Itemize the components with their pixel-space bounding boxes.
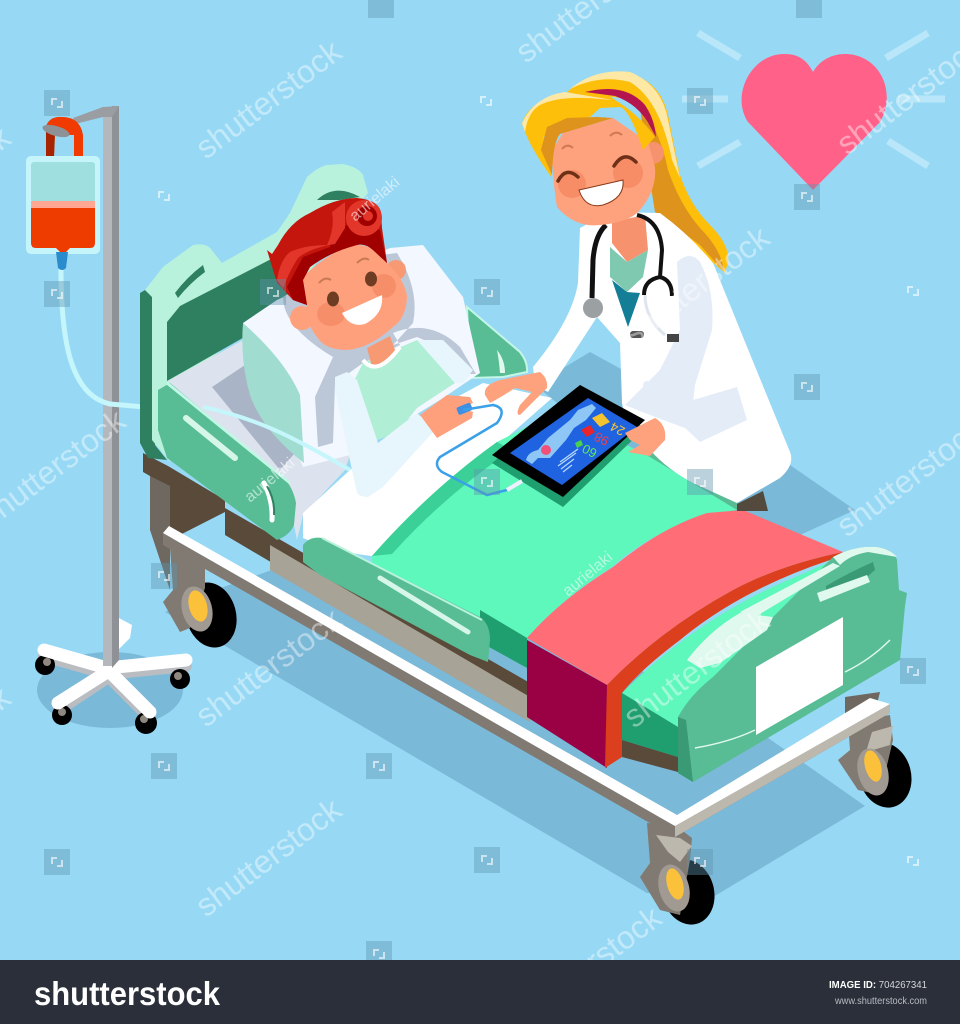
doctor cheeks [558,170,586,198]
body scan [526,404,596,464]
IV stand [26,106,190,734]
rear side rail [467,307,527,378]
footboard [678,547,907,782]
tablet body [492,385,645,497]
pillow mint side [242,323,304,463]
watermarks: aurielaki [347,174,403,225]
tablet: 60 [580,441,599,461]
IV bag [26,156,100,254]
tablet [492,385,645,507]
hanger arm [73,106,119,124]
watermark corner marks [52,97,918,958]
doctor eyes [558,157,636,181]
wheel: foot front [640,823,722,931]
side [605,552,843,768]
doctor brows [562,133,622,149]
patient hand [420,395,473,438]
finger sensor cable [437,405,507,495]
bed under-frame [143,453,880,722]
watermarks: aurielaki [242,455,298,506]
doctor face [552,118,655,225]
pillow shading [283,253,476,447]
doctor coat [533,212,791,503]
footer url: www.shutterstock.com [834,996,927,1007]
cable plug [507,481,522,490]
bag strap [46,117,83,156]
headboard side [140,290,167,460]
top [527,510,843,685]
pillow [242,245,480,467]
bed outer frame [163,526,890,837]
back hair [567,72,728,273]
doctor ear [642,142,664,164]
doctor legs [737,491,768,511]
headboard panel [167,256,292,381]
patient hair [267,198,387,305]
scrub top [610,247,648,292]
IV tube on mattress [203,407,350,470]
footer bar [0,960,960,1024]
tablet: 98 [592,429,611,449]
neck [612,215,648,262]
watermarks: shutterstock [189,790,349,924]
patient brows [319,259,369,283]
tablet: 24 [608,419,627,439]
wheel: foot right [838,715,919,814]
patient arm [335,372,435,497]
watermarks: shutterstock [617,218,777,352]
wheel: head side [163,548,244,653]
near side rail at head [158,383,296,540]
mattress [168,340,350,540]
patient cheeks [317,302,345,326]
watermarks: shutterstock [617,601,777,735]
patient eyes [327,292,339,306]
foot mattress [622,555,870,772]
rear blanket strip [648,447,742,511]
near side rail at foot [303,538,490,662]
heart [742,54,887,190]
patient ears [290,306,314,330]
footer image id: IMAGE ID: 704267341 [829,980,927,991]
front hair [522,91,655,178]
tablet screen [510,398,637,485]
headboard grip [175,265,205,298]
patient [267,198,473,440]
end face [527,640,607,768]
headband [585,89,656,137]
patient hair curl [346,200,382,236]
tablet base [492,393,645,507]
neck [367,336,395,367]
pole [103,112,112,666]
footer logo: shutterstock [34,975,221,1012]
IV nozzle [56,252,68,270]
vitals [592,413,610,427]
watermarks: aurielaki [560,549,616,600]
coat sleeve shade [625,256,712,430]
name card [756,617,843,735]
doctor hands [485,372,665,456]
red blanket [527,510,843,768]
patient mouth [342,295,382,325]
headboard face [145,164,368,462]
floor shadows [37,352,865,897]
sheet [303,383,552,556]
green blanket [372,410,737,668]
IV tube [61,268,157,408]
patient torso [353,340,455,440]
heart rays [682,33,945,166]
patient face [303,245,407,350]
coat pocket [682,387,747,442]
watermarks: shutterstock [189,32,349,166]
stand base [35,617,190,734]
headboard [140,164,368,462]
stethoscope [583,215,679,342]
pillow body [243,245,480,467]
doctor mouth [579,180,623,206]
doctor [522,71,791,511]
watermarks: shutterstock [189,600,349,734]
